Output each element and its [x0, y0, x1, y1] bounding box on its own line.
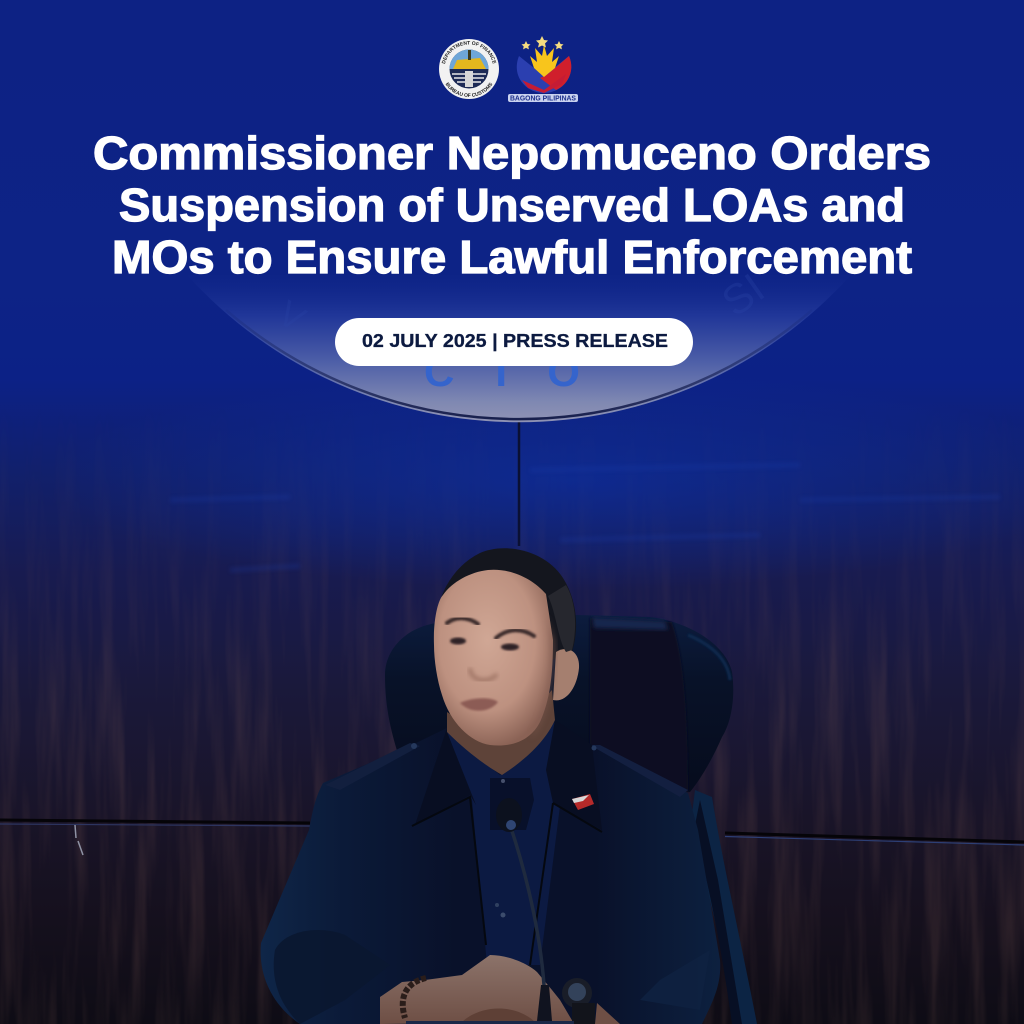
watch [562, 978, 595, 1024]
logos [439, 36, 578, 102]
date pill [335, 318, 693, 366]
chair side strut [690, 790, 757, 1024]
jacket [261, 720, 720, 1024]
neck [447, 690, 555, 775]
collar [415, 728, 476, 825]
date pill: 02 JULY 2025 | PRESS RELEASE [362, 330, 668, 351]
hair back [434, 548, 576, 660]
shirt [447, 722, 562, 965]
title [93, 127, 931, 283]
hands [380, 955, 620, 1024]
logo: Bureau of Customs seal [439, 39, 499, 99]
emblem: wall seal: SI [713, 264, 773, 325]
microphone [496, 798, 552, 1021]
logo: Bagong Pilipinas: BAGONG PILIPINAS [510, 96, 576, 102]
title: Suspension of Unserved LOAs and [119, 179, 905, 231]
emblem: wall seal: CTO [424, 348, 614, 395]
emblem: wall seal [187, 264, 851, 422]
emblem: wall seal: V [271, 292, 313, 340]
background: wood panelling [0, 411, 1024, 1024]
desk edge [406, 1021, 574, 1024]
bracelet [403, 978, 426, 1018]
logo: Bureau of Customs seal: DEPARTMENT OF FINANCE [442, 41, 496, 64]
head [434, 548, 579, 746]
title: MOs to Ensure Lawful Enforcement [112, 231, 912, 283]
title: Commissioner Nepomuceno Orders [93, 127, 931, 179]
flag pin [572, 794, 594, 810]
photo: commissioner at desk [261, 548, 757, 1024]
chair [385, 615, 757, 1024]
logo: Bureau of Customs seal: BUREAU OF CUSTOMS [446, 82, 492, 97]
